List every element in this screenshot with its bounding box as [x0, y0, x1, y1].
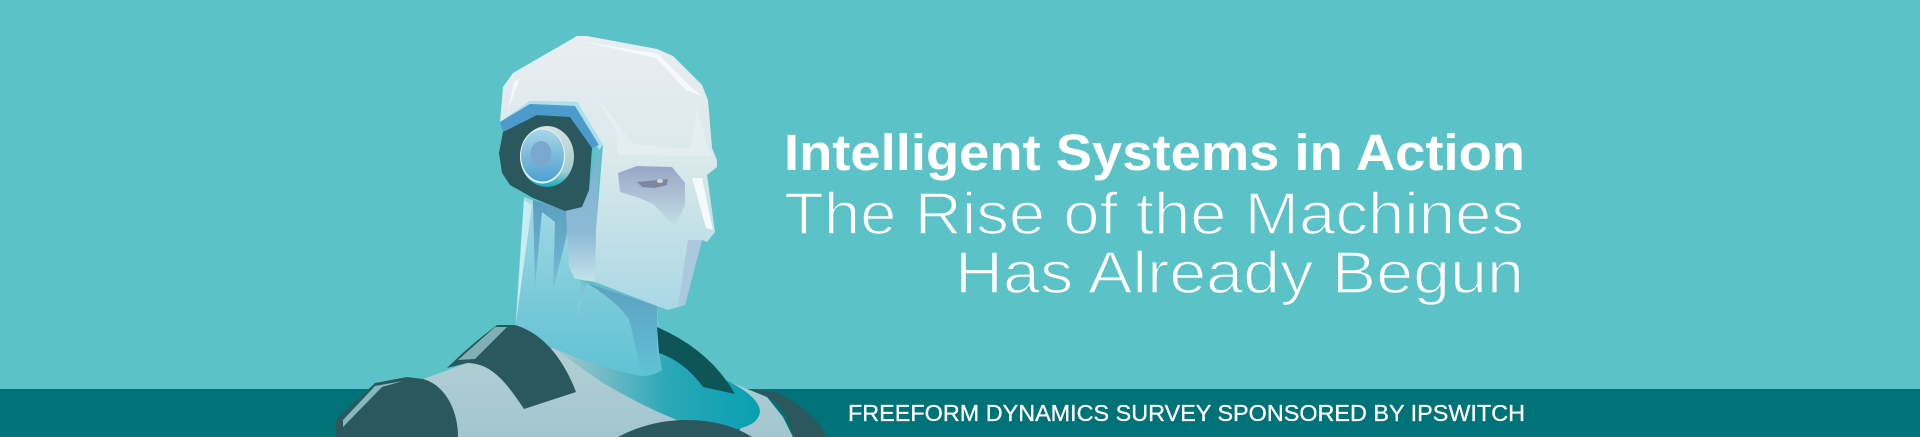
right shoulder — [750, 389, 827, 437]
ear band light — [500, 101, 603, 150]
blue ear patch — [566, 145, 599, 282]
hair-like streaks — [533, 200, 587, 315]
heading: line two: The Rise of the Machines — [784, 181, 1524, 247]
left upper shoulder armour — [447, 325, 576, 409]
robot neck — [515, 197, 662, 376]
eye slit — [637, 179, 668, 188]
neck left highlight — [516, 200, 532, 322]
dark collar arc — [657, 327, 735, 394]
brow ridge — [594, 93, 712, 156]
neck shadow — [587, 283, 662, 376]
footer band — [0, 389, 1920, 437]
ear band blue — [500, 104, 599, 148]
ear disc — [520, 126, 574, 187]
head shell — [500, 36, 717, 310]
lower armour highlight — [343, 381, 403, 427]
pupil — [657, 179, 663, 183]
body — [423, 348, 793, 437]
ear housing — [499, 115, 592, 211]
head top highlights — [508, 41, 702, 110]
eye socket — [618, 166, 685, 227]
left lower shoulder armour — [336, 377, 458, 437]
nose highlight — [692, 178, 713, 230]
armour highlight — [458, 327, 507, 360]
collar — [553, 348, 760, 429]
robot illustration — [336, 36, 827, 437]
chest plate — [618, 420, 752, 437]
footer text: FREEFORM DYNAMICS SURVEY SPONSORED BY IPSWITCH — [848, 400, 1525, 426]
lower face side — [678, 240, 702, 307]
heading: bold: Intelligent Systems in Action — [784, 124, 1525, 181]
heading: line three: Has Already Begun — [955, 240, 1524, 306]
